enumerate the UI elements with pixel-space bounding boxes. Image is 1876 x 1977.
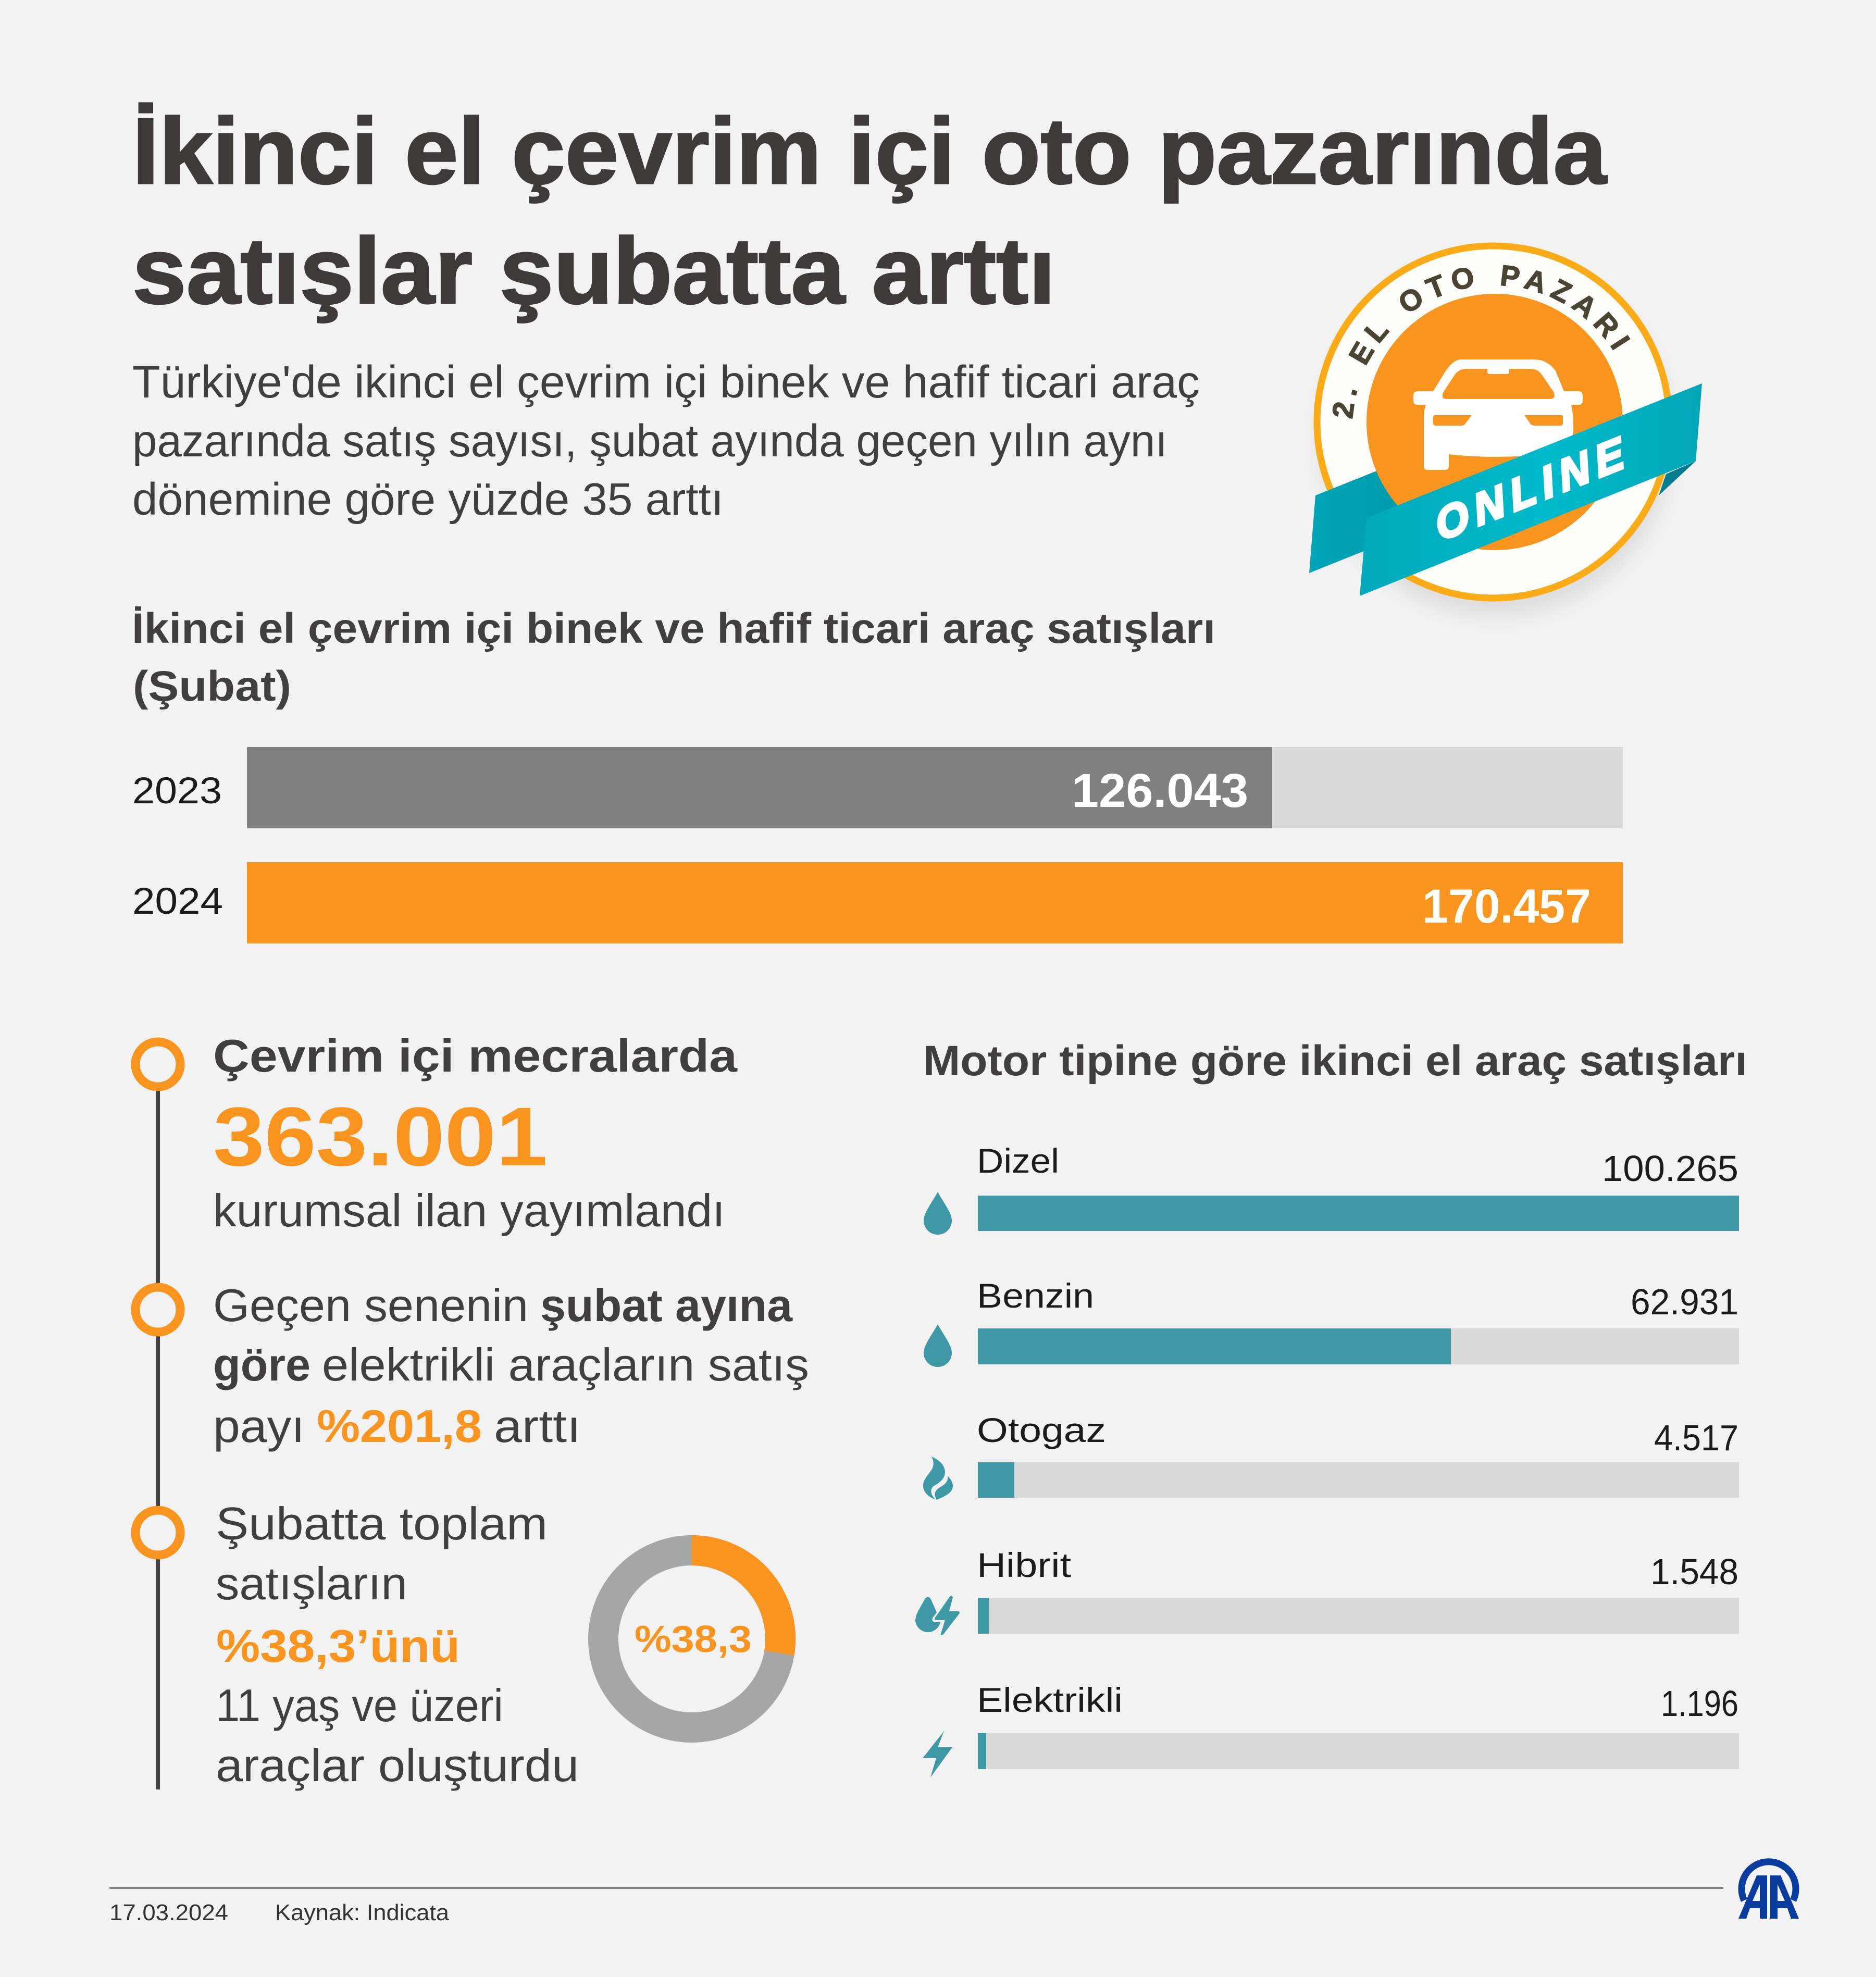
stat: published listings <box>213 1030 738 1236</box>
row: Dizel: Dizel <box>977 1141 1059 1180</box>
stat: electric vehicle share: şubat ayına <box>540 1279 793 1331</box>
icon: drop and bolt <box>915 1596 960 1635</box>
stat: electric vehicle share: arttı <box>494 1400 581 1452</box>
row: Dizel <box>924 1141 1739 1235</box>
row: Hibrit: 1.548 <box>1650 1551 1738 1592</box>
title <box>132 99 1608 324</box>
stat: electric vehicle share <box>213 1279 809 1452</box>
stat: vehicle age share: %38,3’ünü <box>216 1620 460 1672</box>
chart heading: İkinci el çevrim içi binek ve hafif ticari araç satışları <box>132 605 1215 652</box>
footer <box>109 1887 1723 1925</box>
row: Otogaz: Otogaz <box>977 1411 1106 1449</box>
row: Otogaz <box>923 1411 1739 1500</box>
motor type heading: Motor tipine göre ikinci el araç satışları <box>923 1037 1747 1085</box>
stat: published listings: 363.001 <box>213 1090 548 1183</box>
badge shadow <box>1322 266 1671 615</box>
bar 2024 <box>132 862 1623 943</box>
stat: electric vehicle share: %201,8 <box>317 1400 482 1452</box>
timeline line <box>156 1089 160 1789</box>
badge curved text: 2. EL OTO PAZARI <box>1333 265 1631 419</box>
footer date: 17.03.2024 <box>109 1900 228 1925</box>
row: Dizel: 100.265 <box>1602 1148 1738 1189</box>
stat: vehicle age share: Şubatta toplam <box>216 1498 548 1549</box>
bar 2024: 170.457 <box>1422 880 1591 933</box>
subtitle text block: dönemine göre yüzde 35 arttı <box>132 474 724 525</box>
badge orange disc <box>1366 294 1623 550</box>
icon: drop <box>924 1192 952 1235</box>
chart heading: (Şubat) <box>133 663 291 710</box>
front ribbon <box>1360 383 1702 596</box>
bar 2023 <box>132 747 1623 828</box>
timeline marker 3 <box>135 1510 180 1555</box>
back ribbon <box>1309 446 1438 573</box>
chart heading <box>132 605 1215 710</box>
icon: online car market badge <box>1309 243 1702 618</box>
bar 2024: 2024 <box>132 881 223 922</box>
stat: published listings: kurumsal ilan yayımlandı <box>213 1185 725 1236</box>
row: Hibrit: Hibrit <box>977 1546 1071 1584</box>
bar 2023: 2023 <box>132 770 222 812</box>
icon: drop <box>924 1324 952 1367</box>
stat: vehicle age share: satışların <box>216 1558 407 1609</box>
row: Elektrikli <box>923 1681 1739 1777</box>
ribbon fold <box>1659 461 1696 495</box>
stat: electric vehicle share: göre <box>213 1339 310 1390</box>
donut chart <box>603 1550 780 1727</box>
row: Hibrit <box>915 1546 1739 1635</box>
title: İkinci el çevrim içi oto pazarında <box>132 99 1608 204</box>
subtitle text block: Türkiye'de ikinci el çevrim içi binek ve hafif ticari araç <box>132 357 1200 407</box>
bar 2023: 126.043 <box>1072 764 1248 817</box>
stat: electric vehicle share: elektrikli araçların satış <box>322 1339 809 1390</box>
row: Benzin <box>924 1276 1739 1367</box>
stat: vehicle age share: 11 yaş ve üzeri <box>216 1680 503 1731</box>
stat: electric vehicle share: payı <box>213 1400 305 1452</box>
stat: vehicle age share: araçlar oluşturdu <box>216 1739 579 1791</box>
stat: electric vehicle share: Geçen senenin <box>213 1279 528 1331</box>
timeline marker 1 <box>135 1042 180 1087</box>
donut chart: %38,3 <box>635 1619 752 1660</box>
subtitle text block <box>132 357 1200 525</box>
timeline <box>135 1042 180 1789</box>
badge ring <box>1317 246 1669 598</box>
timeline marker 2 <box>135 1287 180 1332</box>
ribbon text: ONLINE <box>1431 428 1630 551</box>
stat: published listings: Çevrim içi mecralarda <box>213 1030 738 1081</box>
motor type chart <box>915 1141 1739 1777</box>
logo: AA <box>1738 1862 1799 1919</box>
icon: car <box>1413 359 1583 470</box>
row: Benzin: 62.931 <box>1631 1282 1738 1322</box>
row: Elektrikli: 1.196 <box>1661 1683 1738 1724</box>
bar chart: yearly sales <box>132 747 1623 943</box>
icon: flame <box>923 1457 953 1500</box>
title: satışlar şubatta arttı <box>132 219 1055 324</box>
row: Benzin: Benzin <box>977 1276 1094 1315</box>
stat: vehicle age share <box>216 1498 579 1791</box>
footer source: Kaynak: Indicata <box>275 1900 450 1925</box>
row: Otogaz: 4.517 <box>1654 1418 1738 1458</box>
row: Elektrikli: Elektrikli <box>977 1681 1123 1719</box>
subtitle text block: pazarında satış sayısı, şubat ayında geçen yılın aynı <box>132 416 1167 466</box>
icon: lightning bolt <box>923 1731 952 1777</box>
